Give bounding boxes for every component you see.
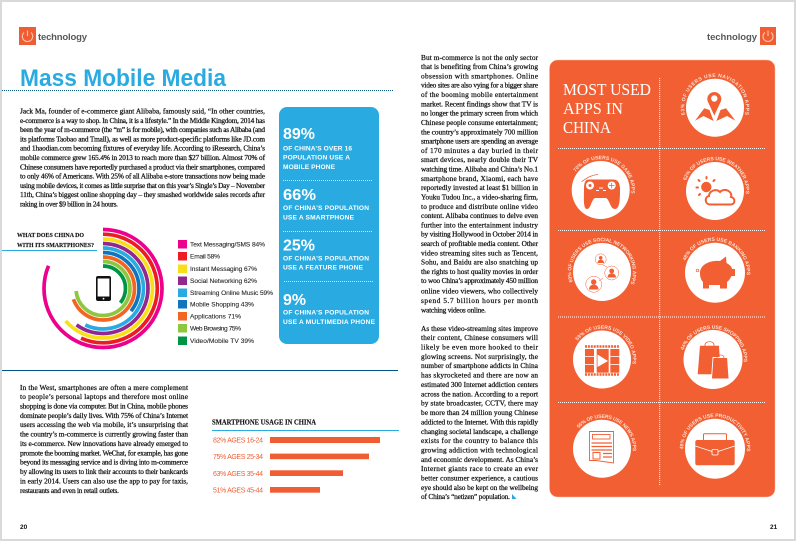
stat: 89 percent: MOBILE PHONE (283, 164, 336, 171)
text block: m-commerce column: no longer the primary screen from which (421, 109, 538, 118)
text block: intro: and 1haodian.com becoming fixtures of everyday life. According to iResearch, China’s (20, 144, 265, 153)
icon: section badge right (760, 27, 776, 45)
section label left: technology (38, 32, 88, 43)
text block: m-commerce column: of 170 minutes a day buried in their (421, 146, 539, 155)
text block: m-commerce column: watching time. Alibaba and China’s No.1 (421, 164, 538, 174)
chart legend: Video/Mobile TV 39% (190, 338, 254, 345)
text block: in the west: in early 2014. Users can also use the app to pay for taxis, (20, 476, 188, 485)
text block: m-commerce column: that is benefiting from China’s growing (421, 62, 538, 71)
text block: addiction (421, 324, 539, 501)
icon: navigation: 63% OF USERS USE NAVIGATION APPS (680, 74, 750, 116)
text block: m-commerce column: video sites are also vying for a bigger share (421, 81, 538, 90)
text block: m-commerce column: of the booming mobile entertainment (421, 90, 538, 99)
heading: radial chart: WITH ITS SMARTPHONES? (17, 242, 94, 249)
text block: in the west: shopping is done via computer. But in China, mobile phones (20, 402, 188, 410)
section label right: technology (707, 32, 758, 43)
text block: m-commerce column: content. Alibaba continues to delve even (421, 211, 538, 220)
chart legend: Email 58% (190, 254, 220, 260)
stat: 25 percent: USE A FEATURE PHONE (283, 265, 364, 272)
text block: intro: mobile commerce grew 165.4% in 2013 to reach more than $27 billion. Almost 70% of (20, 153, 266, 162)
text block: m-commerce column: smartphone users are spending an average (421, 137, 538, 146)
text block: in the west: the country’s m-commerce is currently growing faster than (20, 430, 188, 439)
icon: social networking: 60% OF USERS USE SOCIAL NETWORKING APPS (568, 238, 636, 284)
panel title: CHINA (563, 118, 612, 137)
text block: addiction: by state broadcaster, CCTV, there may (421, 399, 538, 408)
heading: radial chart (2, 232, 97, 251)
icon: news (573, 414, 636, 478)
stat: 25 percent (283, 238, 369, 272)
text block: in the west: to people’s personal laptops and therefore most online (20, 392, 188, 401)
text block: in the west: dominate people’s daily lives. With 75% of China’s Internet (20, 411, 188, 420)
chart legend: Mobile Shopping 43% (190, 302, 254, 309)
text block: in the west: restaurants and even in retail outlets. (20, 486, 119, 495)
icon: game controller (572, 156, 635, 219)
icon: smartphone (96, 276, 111, 301)
text block: m-commerce column: Sohu, and Baidu are also snatching up (421, 258, 538, 267)
text block: in the west: promote the booming market. WeChat, for example, has gone (20, 448, 188, 457)
page number right: 21 (770, 524, 778, 531)
panel: phone statistics (279, 107, 379, 344)
icon: weather (683, 156, 750, 220)
icon: video (573, 325, 636, 388)
page number left: 20 (20, 524, 28, 531)
text block: m-commerce column: video streaming sites such as Tencent, (421, 248, 538, 257)
chart legend: Streaming Online Music 59% (190, 290, 273, 297)
text block: addiction: eye should also be kept on the wellbeing (421, 483, 538, 492)
title: Mass Mobile Media (20, 65, 227, 92)
text block: in the west (20, 383, 188, 495)
stat: 66 percent: OF CHINA'S POPULATION (283, 205, 369, 212)
stat: 89 percent (283, 126, 352, 171)
text block: intro: been the year of m-commerce (the “m” is for mobile), with companies such as Alibaba (and (20, 125, 265, 134)
bar chart: usage by age: 82% AGES 16-24 (213, 437, 263, 444)
text block: intro: Chinese consumers have reportedly purchased a product via their smartphones, compared (20, 162, 265, 171)
heading: radial chart: WHAT DOES CHINA DO (17, 232, 84, 239)
text block: m-commerce column: smartphone brand, Xiaomi, each have (421, 174, 538, 183)
text block: addiction: better consumer experience, a cautious (421, 474, 538, 483)
chart legend: Instant Messaging 67% (190, 266, 257, 273)
text block: addiction: number of smartphone addicts in China (421, 361, 539, 370)
text block: m-commerce column: But m-commerce is not the only sector (421, 53, 539, 62)
text block: m-commerce column: Chinese people consume entertainment; (421, 118, 538, 127)
stat: 9 percent: OF CHINA'S POPULATION (283, 310, 369, 316)
icon: section badge left (19, 27, 36, 45)
text block: addiction: addicted to the Internet. With this rapidly (421, 417, 538, 426)
text block: in the west: users accessing the web via mobile, it’s unsurprising that (20, 420, 188, 429)
text block: addiction: be more than 24 million young Chinese (421, 408, 538, 417)
text block: m-commerce column: Youku Tudou Inc., a video-sharing firm, (421, 192, 538, 202)
stat: 25 percent: OF CHINA'S POPULATION (283, 255, 369, 262)
text block: m-commerce column: smart devices, nearly double their TV (421, 155, 539, 164)
text block: addiction: changing societal landscape, a challenge (421, 427, 538, 436)
text block: addiction: Internet giants race to create an ever (421, 464, 539, 473)
text block: m-commerce column: watching videos online. (421, 306, 486, 314)
text block: addiction: of China’s “netizen” population. (421, 492, 510, 501)
text block: m-commerce column: by visiting Hollywood in October 2014 in (421, 230, 538, 239)
text block: addiction: exists for the country to balance this (421, 436, 538, 445)
icon: navigation (680, 74, 750, 137)
icon: shopping bags (680, 325, 748, 389)
stat: 9 percent: 9% (283, 292, 306, 309)
stat: 9 percent (283, 292, 376, 326)
stat: 66 percent (283, 187, 369, 221)
chart legend: Text Messaging/SMS 84% (190, 242, 265, 248)
text block: intro: 11th, China’s biggest online shopping day – they smashed worldwide sales records after (20, 190, 266, 199)
text block: intro (20, 106, 266, 208)
icon: video: 59% OF USERS USE VIDEO APPS (575, 325, 636, 364)
text block: addiction: As these video-streaming sites improve (421, 324, 538, 333)
text block: m-commerce column: reportedly invested at least $1 billion in (421, 183, 538, 192)
chart legend (178, 240, 273, 345)
text block: addiction: growing addiction with technological (421, 446, 538, 454)
radial bar chart (44, 230, 162, 348)
bar chart: usage by age: 51% AGES 45-44 (213, 488, 263, 495)
text block: intro: raking in over $9 billion in 24 hours. (20, 200, 118, 208)
text block: m-commerce column: to produce and distribute online video (421, 202, 538, 211)
text block: m-commerce column (421, 53, 539, 315)
icon: weather: 62% OF USERS USE WEATHER APPS (683, 156, 750, 194)
panel title: APPS IN (563, 99, 623, 118)
stat: 66 percent: USE A SMARTPHONE (283, 214, 355, 221)
bar chart: usage by age (213, 437, 380, 495)
icon: news: 55% OF USERS USE NEWS APPS (576, 414, 636, 451)
panel: most used apps (549, 60, 776, 498)
text block: m-commerce column: spend 5.7 billion hours per month (421, 296, 538, 305)
text block: m-commerce column: market. Recent findings show that TV is (421, 99, 538, 108)
text block: in the west: In the West, smartphones are often a mere complement (20, 383, 188, 392)
stat: 89 percent: 89% (283, 126, 315, 143)
text block: m-commerce column: the country’s approximately 700 million (421, 127, 538, 136)
text block: intro: using mobile devices, it comes as little surprise that on this year’s Single’s Day – November (20, 181, 266, 190)
text block: m-commerce column: the rights to host quality movies in order (421, 267, 539, 276)
text block: intro: e-commerce is a way to shop. In China, it is a lifestyle.” In the Middle Kingdom, 2014 has (20, 116, 265, 125)
text block: intro: its platforms Taobao and Tmall), as well as more product-specific platforms like JD.com (20, 134, 265, 143)
stat: 89 percent: OF CHINA'S OVER 16 (283, 145, 352, 152)
text block: intro: to only 46% of Americans. With 25% of all Alibaba e-store transactions now being made (20, 172, 265, 181)
stat: 89 percent: POPULATION USE A (283, 155, 350, 162)
text block: addiction: their content, Chinese consumers will (421, 333, 538, 342)
stat: 9 percent: USE A MULTIMEDIA PHONE (283, 319, 376, 326)
icon: briefcase: 49% OF USERS USE PRODUCTIVITY APPS (680, 414, 750, 452)
icon: piggy bank: 48% OF USERS USE BANKING APPS (683, 237, 750, 275)
icon: piggy bank (683, 237, 750, 303)
text block: addiction: across the nation. According to a report (421, 389, 538, 398)
text block: intro: Jack Ma, founder of e-commerce giant Alibaba, famously said, “In other countries, (20, 106, 265, 116)
text block: in the west: beyond its messaging service and is diving into m-commerce (20, 458, 188, 467)
icon: game controller: 70% OF USERS USE GAME APPS (573, 156, 635, 194)
text block: addiction: glowing screens. Not surprisingly, the (421, 352, 538, 361)
text block: addiction: likely be even more hooked to their (421, 342, 539, 352)
text block: in the west: by allowing its users to link their accounts to their bankcards (20, 467, 188, 476)
text block: addiction: has skyrocketed and there are now an (421, 371, 538, 380)
text block: addiction: estimated 300 Internet addiction centers (421, 380, 538, 389)
chart legend: Web Browsing 75% (190, 326, 241, 333)
icon: end mark (512, 494, 516, 499)
bar chart: usage by age: 63% AGES 35-44 (213, 471, 263, 478)
bar chart: usage by age: 75% AGES 25-34 (213, 454, 263, 461)
chart legend: Applications 71% (190, 314, 241, 320)
text block: in the west: its e-commerce. New innovations have already emerged to (20, 439, 188, 448)
text block: m-commerce column: to woo China’s approximately 450 million (421, 276, 538, 285)
stat: 66 percent: 66% (283, 187, 316, 204)
stat: 25 percent: 25% (283, 238, 315, 254)
text block: m-commerce column: search of profitable media content. Other (421, 239, 539, 248)
chart legend: Social Networking 62% (190, 278, 257, 285)
text block: m-commerce column: online video viewers, who collectively (421, 286, 538, 295)
panel title: MOST USED (563, 80, 651, 99)
text block: m-commerce column: further into the entertainment industry (421, 220, 538, 229)
icon: briefcase (680, 414, 750, 479)
text block: addiction: and economic development. As China’s (421, 455, 538, 464)
chart heading: smartphone usage: SMARTPHONE USAGE IN CHINA (212, 418, 317, 427)
text block: m-commerce column: obsession with smartphones. Online (421, 71, 538, 80)
panel title (563, 80, 651, 137)
icon: shopping bags: 44% OF USERS USE SHOPPING APPS (680, 325, 748, 362)
